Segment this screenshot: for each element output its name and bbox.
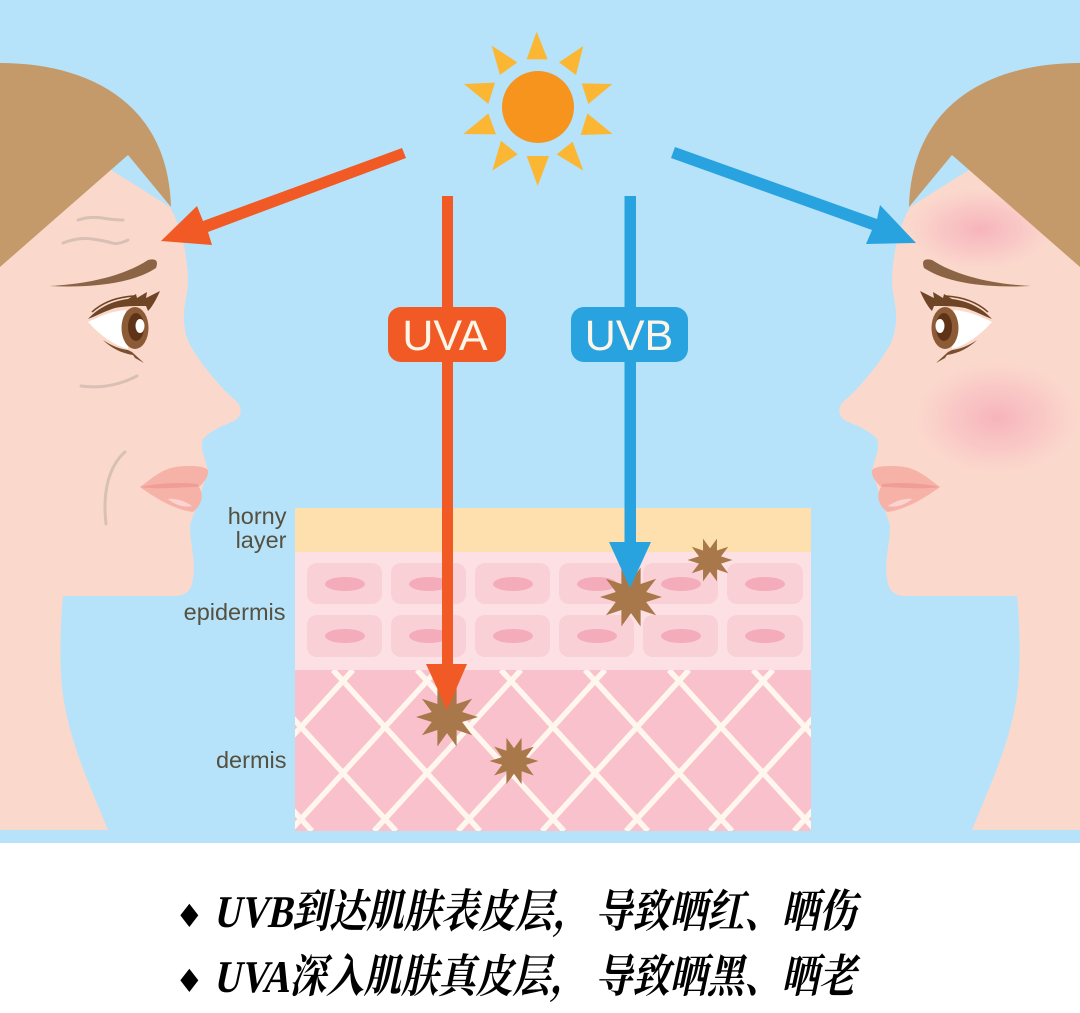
caption line 1: 导致晒红、晒伤	[593, 887, 865, 938]
cell nuclei	[325, 577, 785, 643]
UVB tag	[571, 307, 688, 362]
forehead redness	[905, 187, 1055, 271]
icon: sun	[463, 32, 613, 186]
arrow: UVA to left face	[161, 148, 406, 245]
left eyebrow	[49, 259, 157, 286]
damage star: epidermis large	[600, 568, 662, 626]
sun rays	[463, 32, 613, 186]
horny layer band	[295, 508, 811, 552]
cheek redness	[912, 360, 1080, 476]
right eye	[920, 291, 992, 363]
caption line 1: ♦	[175, 897, 204, 935]
skin cross-section diagram	[184, 507, 811, 831]
right lips	[872, 466, 940, 512]
caption line 2: ♦	[175, 962, 204, 1000]
UVA tag	[388, 307, 506, 362]
left hair	[0, 63, 171, 267]
caption line 1: UVB到达肌肤表皮层，	[211, 887, 599, 938]
UVB tag: UVB	[585, 312, 673, 360]
label: horny layer: layer	[236, 527, 287, 553]
left eye	[88, 291, 160, 363]
right skin profile	[839, 100, 1080, 830]
dermis band	[295, 670, 811, 831]
left lips	[140, 466, 208, 512]
caption line 2: UVA深入肌肤真皮层，	[211, 952, 596, 1003]
right face: UVB redness	[839, 63, 1080, 830]
arrow: UVB vertical	[609, 196, 651, 588]
caption line 2: 导致晒黑、晒老	[593, 952, 865, 1003]
arrow: UVA vertical	[426, 196, 467, 710]
right hair	[909, 63, 1080, 267]
left face: UVA wrinkles	[0, 63, 241, 830]
damage star: dermis large	[416, 688, 478, 746]
arrow: UVB to right face	[671, 147, 916, 244]
label: dermis: dermis	[216, 747, 286, 773]
right eyebrow	[923, 259, 1031, 286]
epidermis cells	[307, 563, 803, 657]
label: epidermis: epidermis	[184, 599, 286, 625]
UVA tag: UVA	[402, 312, 488, 360]
forehead and face wrinkles	[63, 217, 137, 524]
sun disc	[502, 71, 574, 143]
caption line 2	[175, 952, 865, 1003]
damage star: dermis small	[490, 738, 538, 784]
caption line 1	[175, 887, 865, 938]
left skin profile	[0, 100, 241, 830]
damage star: epidermis small	[688, 539, 732, 581]
dermis collagen lattice	[295, 670, 811, 831]
epidermis band	[295, 552, 811, 670]
label: horny layer: horny	[228, 503, 287, 529]
